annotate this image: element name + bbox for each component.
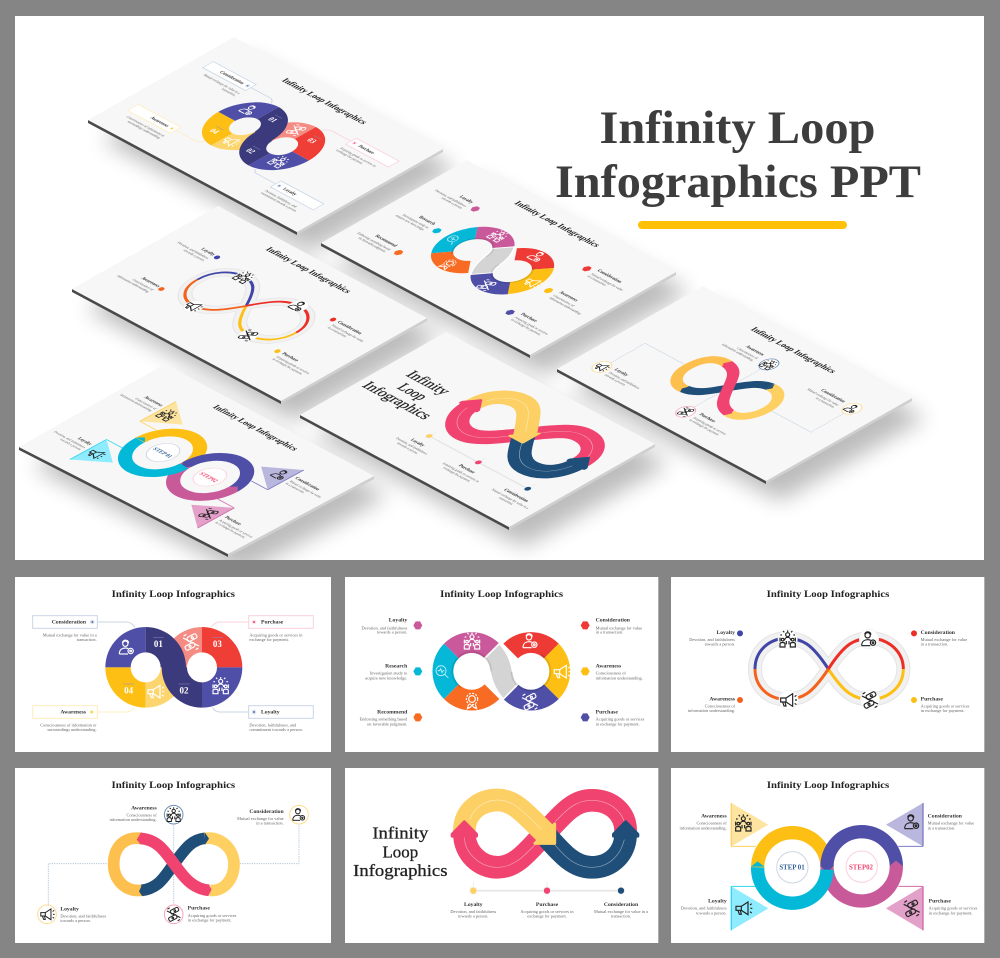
right labels: Purchase: [596, 709, 618, 715]
label: Purchase: Purchase: [261, 620, 284, 626]
segment numbers: 02: [180, 686, 189, 696]
flat slide 4: ribbon infinity with dotted connectors: [15, 768, 331, 943]
labels: [680, 814, 978, 915]
left labels: towards a person.: [377, 630, 407, 635]
label: Consideration: transaction.: [77, 637, 97, 642]
labels: Loyalty: [60, 906, 79, 912]
arrow infinity: [452, 800, 638, 867]
dotted connectors: [48, 823, 299, 906]
labels: Mutual exchange for value: [921, 637, 967, 642]
labels: in a transaction.: [928, 825, 955, 830]
yellow underline bar: [638, 221, 847, 229]
labels: Awareness: [131, 805, 157, 811]
isometric slide stack: [19, 37, 926, 574]
labels: Purchase: [921, 696, 943, 702]
isometric slide: ribbon infinity: [557, 286, 926, 501]
label: Loyalty: Loyalty: [261, 710, 280, 716]
left labels: Recommend: [377, 709, 408, 715]
label: Loyalty: [212, 706, 313, 732]
segment numbers: [123, 637, 223, 696]
labels: Devotion, and faithfulness: [689, 637, 735, 643]
isometric slide: thin line infinity: [72, 206, 441, 421]
label: Consideration: Consideration: [52, 620, 87, 626]
triangle icons: [736, 814, 920, 917]
labels: in exchange for payment.: [929, 910, 973, 915]
timeline: [470, 881, 625, 894]
labels: Acquiring goods or services: [929, 906, 978, 911]
step badges: STEP 01: [779, 864, 805, 872]
labels: Devotion, and faithfulness: [60, 913, 106, 919]
isometric slide: two step rings: [19, 380, 389, 560]
labels: towards a person.: [705, 642, 735, 647]
side title: Infinity: [372, 824, 429, 843]
labels: Awareness: [709, 696, 736, 702]
left labels: on favorable judgment.: [367, 721, 407, 726]
infinity loop segments: [432, 632, 570, 711]
side title: [353, 824, 447, 880]
isometric slide: four segment infinity: [88, 37, 457, 252]
flat slide 2: six segment infinity with hexagons: [345, 577, 658, 752]
side title: Infographics: [353, 861, 447, 880]
labels: Acquiring goods or services in: [520, 909, 574, 914]
labels: in a transaction.: [256, 821, 284, 826]
labels: Purchase: [929, 899, 951, 905]
label: Purchase: exchange for payment.: [249, 637, 289, 642]
right labels: Awareness: [596, 663, 622, 669]
step badges: STEP02: [849, 864, 873, 872]
left labels: Research: [385, 663, 408, 669]
main heading: [555, 102, 921, 208]
isometric slide: six segment infinity: [321, 160, 690, 375]
labels: Mutual exchange for value in a: [594, 909, 648, 914]
isometric slide: arrow infinity: [300, 332, 669, 547]
slide title: Infinity Loop Infographics: [440, 589, 563, 600]
grey loop underlay: [755, 638, 903, 699]
labels: Mutual exchange for value: [237, 816, 284, 821]
labels: Acquiring goods or services: [921, 703, 970, 708]
labels: [688, 630, 970, 713]
slide title: Infinity Loop Infographics: [767, 780, 889, 791]
label: Loyalty: Devotion, faithfulness, and: [249, 722, 297, 728]
left labels: [359, 618, 408, 726]
label: Awareness: Awareness: [60, 710, 87, 716]
slide title: Infinity Loop Infographics: [767, 589, 890, 600]
labels: Loyalty: [708, 899, 727, 905]
side title: Loop: [382, 843, 418, 862]
flat slide 3: thin line infinity: [671, 577, 984, 752]
labels: Devotion, and faithfulness: [450, 909, 497, 915]
labels: Devotion, and faithfulness: [681, 906, 727, 912]
label: Loyalty: commitment towards a person.: [249, 727, 303, 732]
labels: Mutual exchange for value: [928, 821, 974, 826]
slide title: Infinity Loop Infographics: [111, 780, 235, 791]
labels: Consciousness of: [705, 703, 736, 708]
flat slide 5: arrow infinity with side title: [345, 768, 658, 943]
labels: Acquiring goods or services: [188, 913, 237, 918]
slide title: Infinity Loop Infographics: [112, 589, 235, 600]
segment numbers: 01: [154, 639, 163, 649]
labels: exchange for payment.: [527, 914, 567, 919]
right labels: Mutual exchange for value: [596, 625, 642, 630]
flat slide 1: four segment infinity with numbered labels: [15, 577, 331, 752]
left labels: acquire new knowledge.: [365, 675, 407, 680]
labels: towards a person.: [60, 918, 91, 923]
labels: towards a person.: [458, 914, 489, 919]
labels: Purchase: [188, 906, 210, 912]
labels: Loyalty: [464, 902, 483, 908]
label: Consideration: Mutual exchange for value in a: [43, 632, 97, 637]
labels: Consideration: [928, 814, 963, 820]
labels: in a transaction.: [921, 642, 948, 647]
flat slide 6: two step rings with triangles: [671, 768, 984, 943]
right labels: Consideration: [596, 618, 631, 624]
labels: Purchase: [536, 902, 559, 908]
labels: Awareness: [701, 814, 727, 820]
triangles: [731, 803, 923, 930]
right labels: Consciousness of: [596, 671, 626, 676]
right labels: in exchange for payment.: [596, 721, 640, 726]
label: Awareness: surroundings understanding.: [47, 727, 97, 732]
infinity ribbon: [114, 833, 234, 896]
labels: [60, 805, 285, 923]
labels: Consideration: [921, 630, 956, 636]
label: Consideration: [33, 616, 135, 642]
segment icons: [436, 632, 571, 710]
step badges: [777, 851, 877, 883]
label: Awareness: [33, 706, 134, 732]
label: Purchase: [212, 616, 313, 642]
left labels: Loyalty: [389, 618, 407, 624]
main heading: Infinity Loop: [600, 102, 876, 154]
rings: [751, 832, 903, 903]
coloured loop: [755, 638, 903, 699]
labels: Consciousness of: [696, 821, 727, 826]
segment numbers: 03: [213, 639, 222, 649]
right labels: [596, 618, 645, 726]
segment numbers: 04: [124, 685, 134, 695]
labels: information understanding.: [680, 825, 727, 830]
labels: information understanding.: [688, 708, 735, 713]
main heading: Infographics PPT: [555, 156, 921, 208]
left labels: Investigation study to: [370, 671, 407, 676]
labels: in exchange for payment.: [188, 918, 232, 923]
labels: Consideration: [249, 809, 285, 815]
labels: Loyalty: [716, 630, 735, 636]
label: Awareness: Consciousness of information or: [40, 722, 97, 727]
left labels: Endorsing something based: [359, 717, 408, 722]
icon nodes: [38, 805, 308, 924]
right labels: in a transaction.: [596, 630, 623, 635]
hexagon markers: [413, 621, 590, 721]
left labels: Devotion, and faithfulness: [362, 625, 408, 631]
labels: Consciousness of: [126, 812, 157, 817]
segment icons: [119, 633, 228, 698]
labels: in exchange for payment.: [921, 708, 965, 713]
infinity loop segments: [105, 627, 242, 708]
right labels: Acquiring goods or services: [596, 717, 645, 722]
icon nodes: [778, 629, 880, 710]
right labels: information understanding.: [596, 675, 643, 680]
labels: [450, 902, 648, 919]
labels: Consideration: [604, 902, 639, 908]
labels: towards a person.: [696, 910, 727, 915]
labels: transaction.: [611, 914, 631, 919]
label: Purchase: Acquiring goods or services in: [249, 632, 303, 637]
top hero panel: [15, 16, 984, 560]
labels: information understanding.: [110, 817, 157, 822]
